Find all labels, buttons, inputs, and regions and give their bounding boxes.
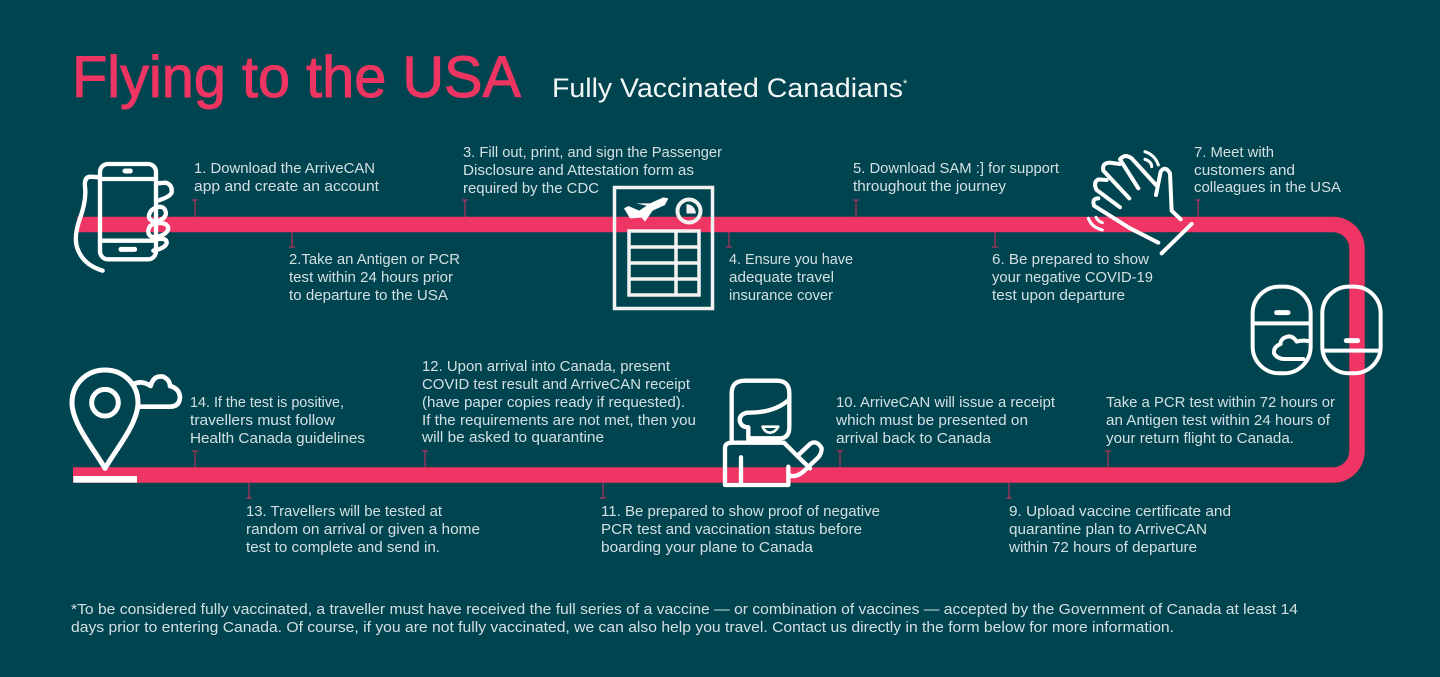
step 5 text: 5. Download SAM :] for support	[853, 161, 1059, 177]
step 3 text: required by the CDC	[463, 181, 599, 197]
step 12 text	[421, 359, 696, 446]
step 4 text: insurance cover	[729, 288, 833, 304]
step 2 text: 2.Take an Antigen or PCR	[289, 252, 460, 268]
step 2 text	[289, 252, 460, 304]
icon: aircraft windows	[1253, 287, 1381, 373]
subtitle: Fully Vaccinated Canadians	[552, 73, 903, 103]
step 1 text: app and create an account	[194, 179, 379, 195]
table	[629, 231, 699, 295]
step 8 text	[1106, 395, 1335, 447]
step 4 text: 4. Ensure you have	[729, 252, 853, 268]
step 7 text: colleagues in the USA	[1194, 180, 1341, 196]
step 6 text: test upon departure	[992, 288, 1125, 304]
step 11 text: 11. Be prepared to show proof of negative	[601, 504, 880, 520]
step 10 text: which must be presented on	[835, 413, 1028, 429]
step 14 text: Health Canada guidelines	[190, 431, 365, 447]
step 3 text: Disclosure and Attestation form as	[463, 163, 694, 179]
cloud	[134, 376, 180, 407]
step 11 text	[601, 504, 880, 556]
step 12 text: 12. Upon arrival into Canada, present	[422, 359, 670, 375]
window with cloud	[1253, 287, 1311, 373]
footnote: *To be considered fully vaccinated, a traveller must have received the full series of a vaccine — or combination of vaccines — accepted by the Government of Canada at least 14	[71, 602, 1298, 618]
step 14 text: 14. If the test is positive,	[190, 395, 344, 411]
step 13 text: test to complete and send in.	[246, 540, 440, 556]
step 9 text	[1008, 504, 1231, 556]
journey track line	[73, 224, 1357, 475]
step 13 text	[246, 504, 480, 556]
step 9 text: within 72 hours of departure	[1008, 540, 1197, 556]
step 6 text	[992, 252, 1153, 304]
plane	[624, 197, 668, 222]
title: Flying to the USA	[72, 45, 521, 110]
step 1 text: 1. Download the ArriveCAN	[194, 161, 375, 177]
step 8 text: an Antigen test within 24 hours of	[1106, 413, 1331, 429]
step 12 text: will be asked to quarantine	[421, 430, 604, 446]
step 13 text: 13. Travellers will be tested at	[246, 504, 442, 520]
step 7 text: customers and	[1194, 163, 1295, 179]
step 10 text	[835, 395, 1055, 447]
end marker bar	[73, 476, 137, 483]
icon: phone in hand	[76, 164, 172, 271]
step 4 text: adequate travel	[729, 270, 834, 286]
step 14 text: travellers must follow	[190, 413, 336, 429]
step 9 text: 9. Upload vaccine certificate and	[1009, 504, 1231, 520]
step 8 text: Take a PCR test within 72 hours or	[1106, 395, 1335, 411]
step 5 text	[853, 161, 1059, 195]
step marker ticks	[192, 200, 1201, 498]
step 8 text: your return flight to Canada.	[1106, 431, 1294, 447]
footnote: days prior to entering Canada. Of course, if you are not fully vaccinated, we can also help you travel. Contact us directly in the form below for more information.	[71, 620, 1174, 636]
step 12 text: If the requirements are not met, then you	[422, 413, 696, 429]
step 13 text: random on arrival or given a home	[246, 522, 480, 538]
step 11 text: PCR test and vaccination status before	[601, 522, 862, 538]
step 3 text	[463, 145, 722, 197]
step 7 text	[1194, 145, 1341, 196]
icon: location pin with cloud	[72, 370, 180, 483]
step 2 text: to departure to the USA	[289, 288, 448, 304]
step 10 text: arrival back to Canada	[836, 431, 992, 447]
window with shade	[1322, 287, 1381, 373]
form sheet	[614, 188, 712, 308]
clock	[678, 200, 700, 222]
pin	[72, 370, 138, 468]
icon: waving hand	[1088, 152, 1192, 253]
step 4 text	[729, 252, 853, 304]
step 6 text: your negative COVID-19	[992, 270, 1153, 286]
step 10 text: 10. ArriveCAN will issue a receipt	[836, 395, 1055, 411]
icon: passenger form with plane and clock	[614, 188, 712, 308]
step 12 text: (have paper copies ready if requested).	[422, 395, 685, 411]
step 7 text: 7. Meet with	[1194, 145, 1274, 161]
step 9 text: quarantine plan to ArriveCAN	[1009, 522, 1207, 538]
subtitle: *	[903, 78, 908, 90]
step 6 text: 6. Be prepared to show	[992, 252, 1150, 268]
step 14 text	[190, 395, 365, 447]
footnote	[71, 602, 1298, 636]
step 1 text	[194, 161, 379, 195]
icon: officer person	[725, 381, 822, 485]
step 5 text: throughout the journey	[853, 179, 1007, 195]
step 12 text: COVID test result and ArriveCAN receipt	[422, 377, 690, 393]
step 11 text: boarding your plane to Canada	[601, 540, 814, 556]
step 2 text: test within 24 hours prior	[289, 270, 453, 286]
step 3 text: 3. Fill out, print, and sign the Passenger	[463, 145, 722, 161]
